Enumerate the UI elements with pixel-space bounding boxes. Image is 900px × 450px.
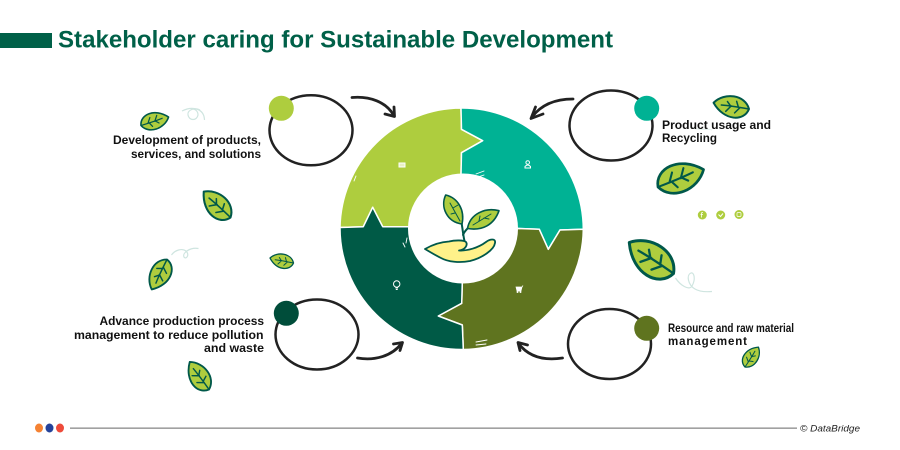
text: development: services, and solutions [131, 149, 261, 161]
social icons [698, 210, 744, 220]
leaf 6 [712, 93, 751, 120]
icon: cart [516, 286, 523, 293]
decorative swirl: right [676, 273, 712, 292]
icon: briefcase [399, 163, 405, 167]
segment scribbles [350, 171, 487, 345]
dot: teal [634, 96, 659, 121]
title: Stakeholder caring for Sustainable Development [58, 26, 613, 54]
leaf veins [450, 203, 491, 225]
dot: light green [269, 96, 294, 121]
header bar [0, 33, 52, 48]
leaf 1 [138, 109, 171, 133]
dot: dark green [274, 301, 299, 326]
text: resource: Resource and raw material [668, 323, 794, 335]
text: resource: management [668, 336, 747, 348]
leaf 2 [196, 184, 238, 226]
segment: teal [461, 108, 583, 249]
text: advance production: Advance production process [100, 316, 264, 328]
leaf 7 [653, 155, 708, 199]
segment: olive [438, 228, 583, 350]
footer line [70, 428, 797, 429]
leaf 3 [144, 255, 176, 294]
callout: bottom-left ring [274, 300, 358, 370]
leaf 4 [268, 252, 295, 270]
segment: light green [340, 108, 483, 228]
inner white circle [408, 174, 518, 284]
plant right leaf [468, 210, 499, 229]
footer credit: © DataBridge [800, 424, 860, 434]
callout: top-left ring [269, 95, 352, 165]
decorative swirl: top left [182, 108, 204, 120]
text: advance production [74, 316, 264, 355]
decorative swirl: behind product text [690, 127, 712, 130]
arrow: bottom-right [518, 342, 562, 359]
arrow: bottom-left [358, 342, 402, 359]
dot: olive [634, 316, 659, 341]
text: product usage [662, 120, 771, 145]
leaf 9 [739, 343, 764, 371]
footer dots [35, 424, 64, 432]
text: resource [668, 323, 794, 348]
central segmented circle [340, 108, 583, 350]
hand [425, 240, 495, 262]
callout: top-right ring [570, 90, 659, 160]
leaf 5 [181, 357, 216, 395]
icon: light bulb [394, 281, 400, 290]
segment: dark green [340, 207, 463, 350]
text: development: Development of products, [113, 135, 261, 147]
callout: bottom-right ring [568, 309, 659, 379]
plant left leaf [444, 195, 463, 224]
text: product usage: Product usage and [662, 120, 771, 132]
arrow: top-left [352, 97, 394, 116]
plant stem [461, 220, 465, 243]
leaf 8 [620, 230, 682, 287]
decorative swirl: left [172, 248, 198, 258]
text: product usage: Recycling [662, 133, 717, 145]
text: advance production: and waste [204, 343, 264, 355]
text: development [113, 135, 261, 161]
icon: person [525, 161, 530, 168]
text: advance production: management to reduce pollution [74, 330, 264, 342]
arrow: top-right [531, 99, 573, 118]
center icon: plant on hand [425, 195, 499, 262]
